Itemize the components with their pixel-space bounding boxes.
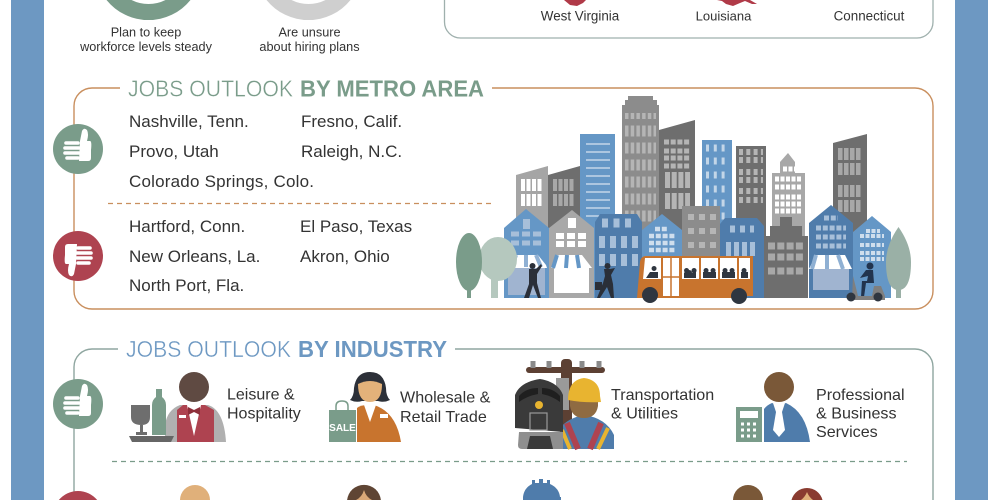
icon: two people [733, 485, 822, 500]
icon: train, pole and utility worker [515, 359, 614, 449]
panel: workforce donuts [79, 0, 360, 54]
states panel border [444, 0, 933, 38]
metro heading: JOBS OUTLOOK [128, 76, 293, 102]
shop awnings [507, 255, 852, 269]
panel: states [444, 0, 933, 38]
icon: business professional [736, 372, 810, 442]
weak metros list: New Orleans, La. [129, 247, 260, 266]
bag label: SALE [329, 423, 356, 434]
metro panel border [74, 88, 933, 309]
good metros list: Provo, Utah [129, 142, 219, 161]
industry panel border [74, 349, 933, 500]
pedestrians [524, 263, 615, 298]
label: leisure and hospitality: Leisure & [227, 386, 295, 404]
donut: keep workforce steady [106, 0, 190, 20]
panel: jobs outlook by industry [53, 336, 933, 500]
label: Connecticut: Connecticut [834, 8, 905, 24]
donut: unsure [266, 0, 350, 20]
back buildings [516, 96, 867, 298]
label: professional and business services: Services [816, 423, 878, 441]
label: Louisiana: Louisiana [696, 8, 752, 24]
label: plan to keep workforce steady: workforce levels steady [79, 40, 213, 54]
icon: thumbs up industry [53, 379, 103, 429]
label: plan to keep workforce steady: Plan to keep [111, 26, 181, 40]
icon: person with light skin [180, 485, 210, 500]
industry heading: JOBS OUTLOOK [126, 336, 291, 362]
trees [456, 227, 911, 298]
icon: thumbs down industry [59, 491, 97, 500]
good metros list: Nashville, Tenn. [129, 112, 249, 131]
panel: jobs outlook by metro area [53, 76, 933, 309]
good metros list: Fresno, Calif. [301, 112, 402, 131]
metro heading: BY METRO AREA [300, 76, 484, 102]
label: transportation and utilities: & Utilities [611, 404, 678, 422]
label: professional and business services: Professional [816, 386, 905, 404]
weak metros list: North Port, Fla. [129, 276, 244, 295]
label: transportation and utilities: Transportation [611, 386, 714, 404]
map: Louisiana [717, 0, 757, 6]
label: West Virginia: West Virginia [541, 8, 620, 24]
label: professional and business services: & Business [816, 404, 897, 422]
icon: construction hard hat [523, 479, 561, 500]
icon: thumbs up [53, 124, 103, 174]
weak metros list: El Paso, Texas [300, 217, 412, 236]
weak metros list: Akron, Ohio [300, 247, 390, 266]
bus [637, 256, 753, 304]
left blue border [11, 0, 44, 500]
label: leisure and hospitality: Hospitality [227, 406, 301, 422]
scooter rider [846, 262, 885, 302]
good metros list: Colorado Springs, Colo. [129, 172, 314, 191]
industry heading: BY INDUSTRY [298, 336, 447, 362]
label: wholesale and retail trade: Retail Trade [400, 408, 487, 426]
icon: waiter [129, 372, 226, 442]
map: West Virginia [564, 0, 586, 6]
label: unsure about hiring plans: about hiring plans [259, 40, 360, 54]
label: unsure about hiring plans: Are unsure [278, 26, 341, 40]
front row houses [504, 205, 891, 298]
icon: retail worker [329, 372, 401, 442]
good metros list: Raleigh, N.C. [301, 142, 402, 161]
label: wholesale and retail trade: Wholesale & [400, 388, 491, 406]
illustration: city skyline [456, 96, 911, 304]
right blue border [955, 0, 988, 500]
icon: thumbs down [53, 231, 103, 281]
weak metros list: Hartford, Conn. [129, 217, 245, 236]
icon: person with brown hair [347, 485, 381, 500]
